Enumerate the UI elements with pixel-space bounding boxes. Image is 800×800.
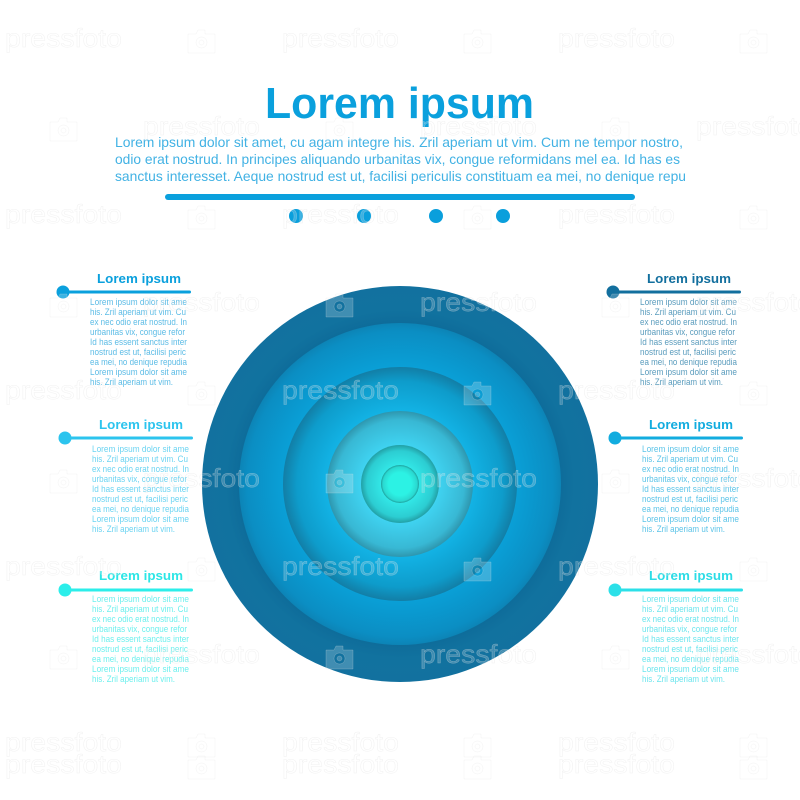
watermark overlay: pressfoto	[696, 111, 800, 141]
watermark overlay: pressfoto	[5, 199, 122, 229]
panel: left item 2: ex nec odio erat nostrud. In	[92, 464, 189, 475]
watermark overlay: pressfoto	[143, 463, 260, 493]
panel: left item 2: nostrud est ut, facilisi peric	[92, 494, 188, 505]
panel: left item 2: his. Zril aperiam ut vim. Cu	[92, 454, 188, 465]
panel: right item 1: Lorem ipsum dolor sit ame	[640, 297, 737, 308]
watermark overlay: pressfoto	[558, 551, 675, 581]
panel: right item 1	[606, 271, 741, 388]
panel: left item 2: urbanitas vix, congue refor	[92, 474, 187, 485]
watermark overlay: pressfoto	[696, 639, 800, 669]
watermark overlay: pressfoto	[5, 749, 122, 779]
watermark overlay: pressfoto	[420, 463, 537, 493]
panel: left item 3: Lorem ipsum dolor sit ame	[92, 594, 189, 605]
panel: left item 1	[56, 271, 191, 388]
watermark overlay: pressfoto	[696, 287, 800, 317]
panel: right item 2	[608, 417, 743, 535]
watermark overlay: pressfoto	[558, 749, 675, 779]
panel: left item 1: his. Zril aperiam ut vim.	[90, 377, 173, 388]
panel: right item 3: Lorem ipsum dolor sit ame	[642, 594, 739, 605]
panel: left item 1: Id has essent sanctus inter	[90, 337, 187, 348]
panel: left item 3: nostrud est ut, facilisi peric	[92, 644, 188, 655]
panel: right item 1: Lorem ipsum dolor sit ame	[640, 367, 737, 378]
watermark overlay: pressfoto	[558, 375, 675, 405]
panel: left item 3: ex nec odio erat nostrud. In	[92, 614, 189, 625]
intro text block: sanctus interesset. Aeque nostrud est ut, facilisi periculis constituam ea mei, no denique repu	[115, 168, 686, 184]
panel: left item 2: Lorem ipsum	[99, 417, 183, 432]
watermark overlay: pressfoto	[282, 199, 399, 229]
panel: left item 1: urbanitas vix, congue refor	[90, 327, 185, 338]
intro text block: odio erat nostrud. In principes aliquando urbanitas vix, congue reformidans mel ea. Id has es	[115, 151, 680, 167]
panel: left item 1: ea mei, no denique repudia	[90, 357, 188, 368]
panel: right item 1: ea mei, no denique repudia	[640, 357, 738, 368]
panel: left item 1: Lorem ipsum dolor sit ame	[90, 297, 187, 308]
intro text block	[115, 134, 686, 184]
panel: right item 1: ex nec odio erat nostrud. In	[640, 317, 737, 328]
panel: left item 1: Lorem ipsum	[97, 271, 181, 286]
panel: left item 3: Lorem ipsum dolor sit ame	[92, 664, 189, 675]
panel: right item 2: his. Zril aperiam ut vim. Cu	[642, 454, 738, 465]
watermark overlay: pressfoto	[282, 23, 399, 53]
watermark overlay: pressfoto	[143, 287, 260, 317]
watermark overlay: pressfoto	[420, 287, 537, 317]
panel: right item 3: Id has essent sanctus inter	[642, 634, 739, 645]
header divider bar	[165, 194, 635, 200]
watermark overlay: pressfoto	[143, 639, 260, 669]
panel: right item 3: ex nec odio erat nostrud. In	[642, 614, 739, 625]
panel: left item 1: nostrud est ut, facilisi peric	[90, 347, 186, 358]
panel: left item 3: his. Zril aperiam ut vim. Cu	[92, 604, 188, 615]
panel: right item 2: nostrud est ut, facilisi peric	[642, 494, 738, 505]
panel: right item 3: his. Zril aperiam ut vim.	[642, 674, 725, 685]
watermark overlay: pressfoto	[143, 111, 260, 141]
panel: right item 1: his. Zril aperiam ut vim.	[640, 377, 723, 388]
panel: right item 1: Lorem ipsum	[647, 271, 731, 286]
concentric circle chart	[202, 286, 598, 682]
panel: left item 3: ea mei, no denique repudia	[92, 654, 190, 665]
panel: right item 3: nostrud est ut, facilisi peric	[642, 644, 738, 655]
watermark overlay: pressfoto	[558, 23, 675, 53]
panel: right item 3: Lorem ipsum dolor sit ame	[642, 664, 739, 675]
title: Lorem ipsum	[265, 79, 534, 128]
panel: left item 2: Id has essent sanctus inter	[92, 484, 189, 495]
watermark overlay: pressfoto	[558, 199, 675, 229]
panel: right item 1: his. Zril aperiam ut vim. Cu	[640, 307, 736, 318]
panel: left item 2: ea mei, no denique repudia	[92, 504, 190, 515]
watermark overlay: pressfoto	[5, 551, 122, 581]
panel: left item 1: Lorem ipsum dolor sit ame	[90, 367, 187, 378]
panel: right item 2: Lorem ipsum	[649, 417, 733, 432]
panel: right item 2: ea mei, no denique repudia	[642, 504, 740, 515]
panel: left item 3	[58, 568, 193, 685]
panel: left item 3: urbanitas vix, congue refor	[92, 624, 187, 635]
panel: right item 3	[608, 568, 743, 685]
watermark overlay: pressfoto	[282, 551, 399, 581]
panel: left item 2: Lorem ipsum dolor sit ame	[92, 514, 189, 525]
panel: left item 3: his. Zril aperiam ut vim.	[92, 674, 175, 685]
row of four dots	[289, 209, 510, 223]
panel: left item 2	[58, 417, 193, 535]
watermark overlay: pressfoto	[5, 375, 122, 405]
panel: left item 2: his. Zril aperiam ut vim.	[92, 524, 175, 535]
watermark overlay: pressfoto	[282, 375, 399, 405]
intro text block: Lorem ipsum dolor sit amet, cu agam integre his. Zril aperiam ut vim. Cum ne tempor nostro,	[115, 134, 683, 150]
panel: right item 2: ex nec odio erat nostrud. In	[642, 464, 739, 475]
watermark overlay: pressfoto	[420, 111, 537, 141]
panel: right item 2: urbanitas vix, congue refor	[642, 474, 737, 485]
watermark overlay: pressfoto	[282, 749, 399, 779]
panel: right item 1: Id has essent sanctus inter	[640, 337, 737, 348]
panel: right item 3: urbanitas vix, congue refor	[642, 624, 737, 635]
watermark overlay: pressfoto	[282, 727, 399, 757]
watermark overlay: pressfoto	[558, 727, 675, 757]
panel: right item 3: his. Zril aperiam ut vim. Cu	[642, 604, 738, 615]
panel: left item 1: his. Zril aperiam ut vim. Cu	[90, 307, 186, 318]
panel: right item 2: Lorem ipsum dolor sit ame	[642, 444, 739, 455]
watermark overlay: pressfoto	[5, 23, 122, 53]
panel: right item 1: urbanitas vix, congue refor	[640, 327, 735, 338]
panel: right item 2: Lorem ipsum dolor sit ame	[642, 514, 739, 525]
panel: left item 3: Lorem ipsum	[99, 568, 183, 583]
panel: left item 2: Lorem ipsum dolor sit ame	[92, 444, 189, 455]
watermark overlay: pressfoto	[420, 639, 537, 669]
panel: right item 3: Lorem ipsum	[649, 568, 733, 583]
panel: left item 1: ex nec odio erat nostrud. In	[90, 317, 187, 328]
watermark overlay: pressfoto	[5, 727, 122, 757]
panel: right item 1: nostrud est ut, facilisi peric	[640, 347, 736, 358]
panel: left item 3: Id has essent sanctus inter	[92, 634, 189, 645]
panel: right item 2: Id has essent sanctus inter	[642, 484, 739, 495]
watermark overlay: pressfoto	[696, 463, 800, 493]
panel: right item 3: ea mei, no denique repudia	[642, 654, 740, 665]
panel: right item 2: his. Zril aperiam ut vim.	[642, 524, 725, 535]
